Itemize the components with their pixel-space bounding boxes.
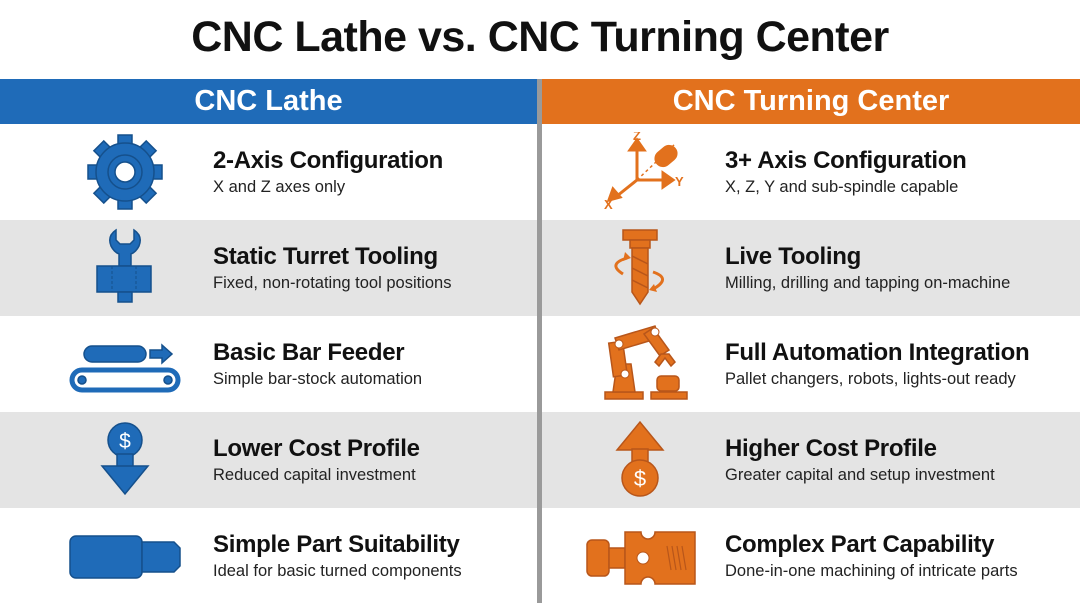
icon: xyz axes [604,132,684,212]
item: simple part: Simple Part Suitability [213,531,460,558]
item: 2-axis: 2-Axis Configuration [213,147,443,174]
header: CNC Lathe [0,79,537,124]
item: complex part [586,531,1018,585]
header: CNC Lathe: CNC Lathe [194,85,343,117]
icon: down arrow dollar [100,422,150,495]
item: simple part [69,531,462,580]
icon: xyz axes: Y [675,174,684,189]
panel: CNC Turning Center [586,132,1029,585]
item: bar feeder: Basic Bar Feeder [213,339,404,366]
item: static turret [96,228,451,303]
item: lower cost: Reduced capital investment [213,466,416,484]
icon: simple part [69,535,181,579]
item: automation [604,325,1029,400]
item: bar feeder: Simple bar-stock automation [213,370,422,388]
icon: up arrow dollar [616,421,664,497]
title: CNC Lathe vs. CNC Turning Center [191,13,889,61]
item: live tooling [614,229,1010,306]
icon: down arrow dollar: $ [119,430,131,453]
item: 2-axis [87,134,443,210]
item: complex part: Complex Part Capability [725,531,994,558]
item: static turret: Static Turret Tooling [213,243,438,270]
icon: up arrow dollar: $ [634,466,646,491]
item: higher cost [616,421,995,497]
item: simple part: Ideal for basic turned components [213,562,462,580]
icon: gear [87,134,163,210]
item: live tooling: Live Tooling [725,243,861,270]
item: bar feeder [70,339,422,392]
item: live tooling: Milling, drilling and tapping on-machine [725,274,1010,292]
icon: complex part [586,531,696,585]
item: 3+ axis [604,132,967,212]
icon: robot arm [604,325,688,400]
item: 2-axis: X and Z axes only [213,178,345,196]
panel: CNC Lathe [69,134,462,580]
item: automation: Pallet changers, robots, lights-out ready [725,370,1016,388]
icon: rotating drill [614,229,664,306]
icon: xyz axes: X [604,197,613,212]
item: automation: Full Automation Integration [725,339,1029,366]
item: 3+ axis: 3+ Axis Configuration [725,147,967,174]
item: complex part: Done-in-one machining of intricate parts [725,562,1018,580]
header: CNC Turning Center: CNC Turning Center [673,85,949,117]
item: lower cost: Lower Cost Profile [213,435,420,462]
item: lower cost [100,422,420,495]
icon: bar feeder [70,344,180,392]
item: 3+ axis: X, Z, Y and sub-spindle capable [725,178,958,196]
item: higher cost: Higher Cost Profile [725,435,937,462]
header: CNC Turning Center [542,79,1080,124]
icon: wrench turret [96,228,152,303]
item: higher cost: Greater capital and setup investment [725,466,995,484]
item: static turret: Fixed, non-rotating tool positions [213,274,451,292]
